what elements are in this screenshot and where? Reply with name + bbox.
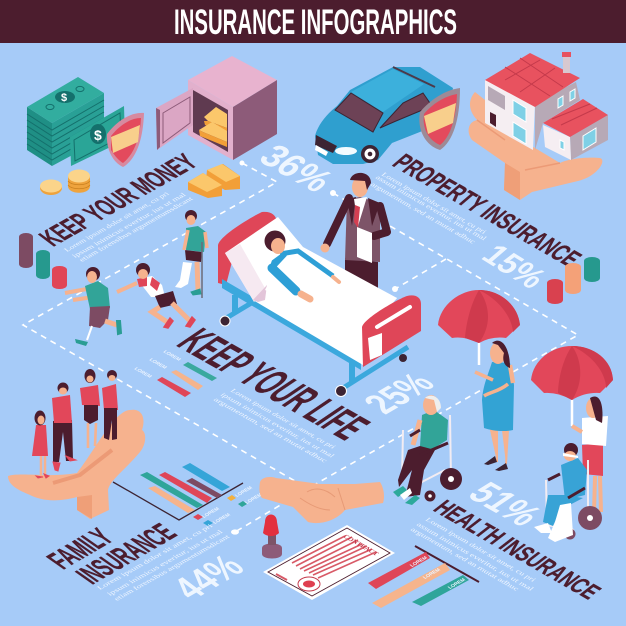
text block: health insurance: argumentum, sed an mutat adhuc [408,526,521,592]
text block: keep your money: ipsum inimicus everitur, ius ut mal [70,192,188,259]
bars: keep your life legend: LOREM [132,367,153,379]
son [102,370,118,440]
text block: family insurance: Lorem ipsum dolor sit amet, cu pri [95,523,215,591]
figure: doctor [320,173,387,289]
bar chart: family: LOREM [234,486,254,498]
icon: umbrella two [531,346,613,426]
bars: health legend: LOREM [422,568,442,580]
bars: keep your life legend: LOREM [147,358,168,370]
figure: running man with sling [117,263,195,328]
bars: keep your life legend: LOREM [161,350,182,362]
figure: injured man in wheelchair [534,443,602,542]
mother [80,369,100,448]
percent: 44%: 44% [164,548,253,606]
percent: 36%: 36% [250,139,341,199]
text block: keep your money: etiam forensibus argumentumsdicant [77,196,195,263]
girl [32,410,49,478]
icon: umbrella one [438,290,520,365]
text block: family insurance [95,523,232,602]
icon: shield on car [419,88,460,150]
text block: health insurance: Lorem ipsum dolor sit amet, cu pri [423,516,538,583]
contract document: CONTRACT [342,533,380,558]
bar chart: family [113,463,264,526]
heading: keep your life: KEEP YOUR LIFE [167,321,381,447]
icon: money stack: $ [61,92,67,104]
text block: property insurance: Lorem ipsum dolor sit amet, cu pri [379,171,488,235]
heading: keep your money: KEEP YOUR MONEY [33,150,205,251]
icon: shield on money [107,113,144,167]
patient [264,230,339,299]
text block: keep your money: Lorem ipsum dolor sit amet, cu pri [62,191,171,253]
text block: keep your life: Lorem ipsum dolor sit amet, cu pri [228,388,338,450]
text block: property insurance: assum inimicus everitur, ius ut mal [373,174,488,242]
illustration: hospital bed [218,212,421,396]
bar chart: family: LOREM [201,507,221,519]
heading: family insurance: FAMILY [39,523,121,574]
bars: health legend: LOREM [409,556,429,568]
icon: hand holding house [469,52,608,200]
icon: left cylinders [19,233,67,289]
percent: 51%: 51% [459,476,551,532]
bar chart: family: LOREM [244,493,264,505]
text block: keep your life [211,388,338,464]
text block: health insurance [408,516,538,592]
figure: woman pushing wheelchair [572,397,608,514]
house [485,52,608,160]
text block: family insurance: etiam forensibus argumentumsdicant [112,534,232,602]
bars: keep your life legend [132,350,217,397]
text block: health insurance: assum inimicus everitur, ius ut mal [414,521,536,592]
figure: pregnant woman [475,341,514,471]
text block: property insurance: argumentum, sed an mutat adhuc [368,181,477,245]
header band [0,0,626,43]
bars: health legend [368,546,479,608]
icon: stamp [262,514,282,558]
icon: money stack [27,77,125,166]
icon: handshake [259,477,384,523]
icon: gold bars [188,164,240,198]
text block: family insurance: ipsum inimicus everitur, ius ut mal [105,529,225,597]
heading: family insurance: INSURANCE [68,518,184,589]
text block: property insurance [368,171,488,245]
icon: right cylinders [547,257,600,304]
figure: runner with prosthetic [65,267,121,346]
contract document [263,525,395,600]
percent: 25%: 25% [355,367,444,420]
icon: money stack: $ [94,127,102,143]
icon: coins [40,170,90,195]
figure: man in wheelchair [393,395,462,505]
icon: car [315,67,453,164]
percent: 15%: 15% [474,239,554,295]
figure: man with crutch [175,210,207,298]
dashed connector lines [23,160,578,535]
bars: health legend: LOREM [447,578,467,590]
icon: open safe [156,56,277,160]
text block: keep your life: ipsum inimicus everitur, ius ut mal [218,392,336,459]
bar chart: family: LOREM [212,513,232,525]
text block: keep your life: argumentum, sed an mutat adhuc [211,397,329,464]
text block: keep your money [62,191,195,263]
heading: family insurance [39,518,184,589]
father [52,382,76,471]
figure: family on hand [8,369,145,519]
